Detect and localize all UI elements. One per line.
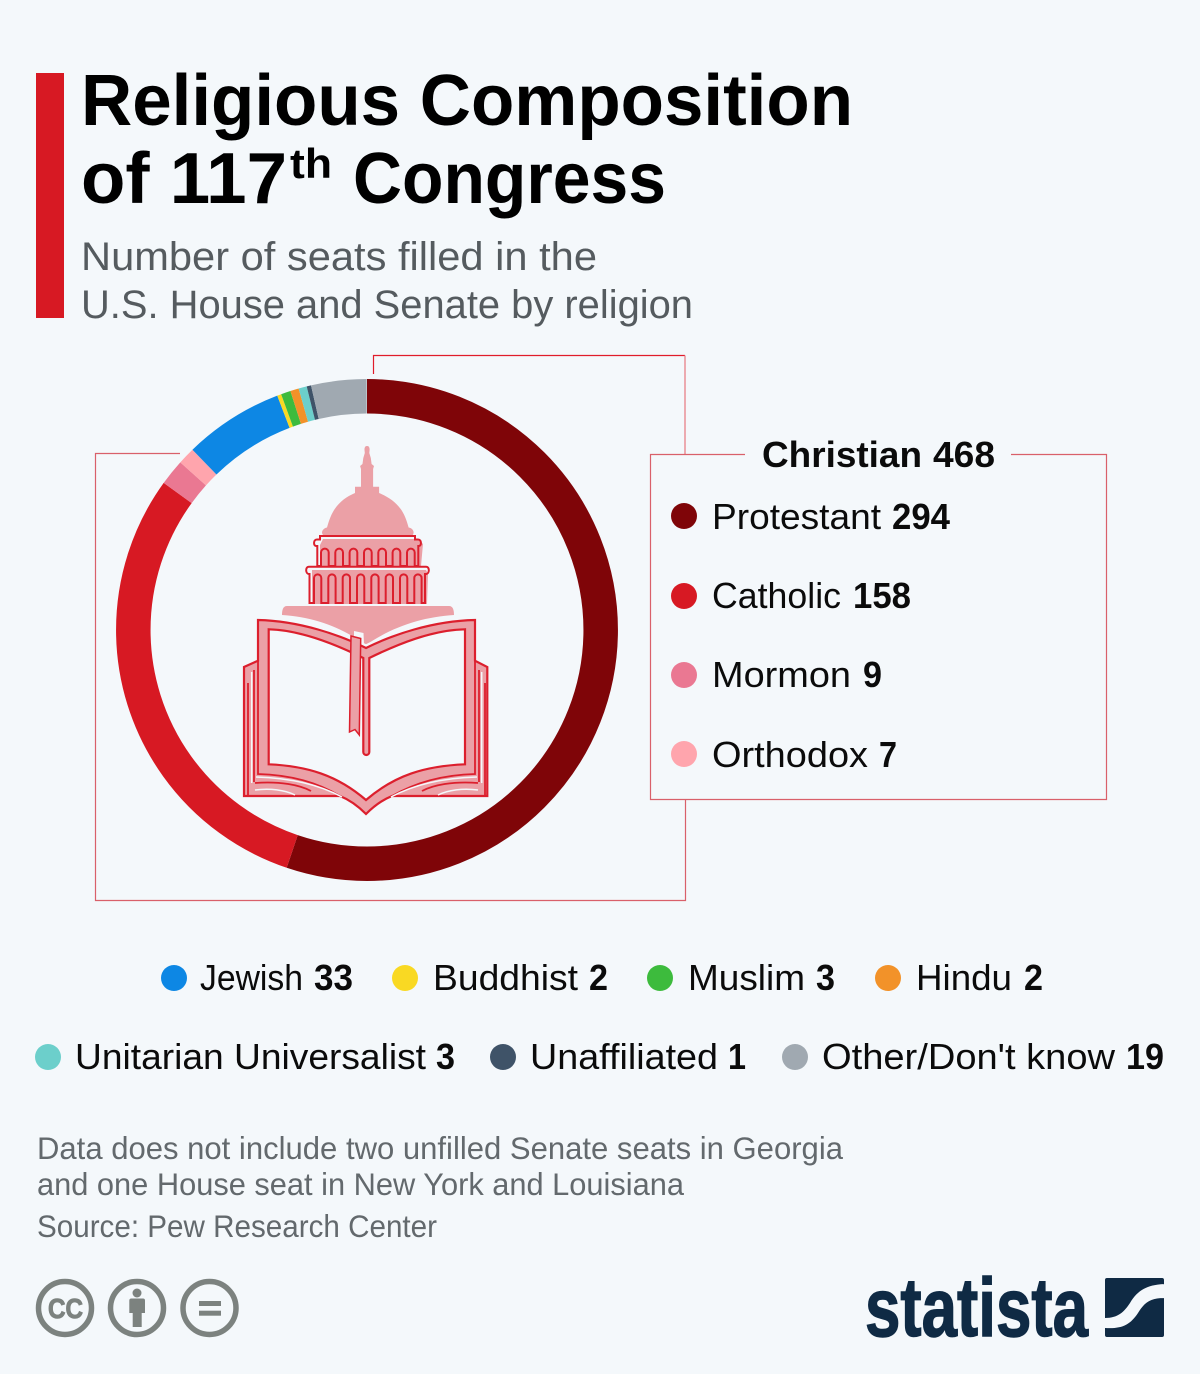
icon: creative commons [38,1282,92,1334]
legend item: Orthodox: 7 [879,734,897,775]
title: Congress [353,139,666,219]
footnote [37,1130,843,1202]
legend item: Catholic [671,575,911,616]
title: of 117 [81,139,287,219]
panel: Christian legend [650,434,1106,800]
title: Religious Composition [81,61,853,141]
legend item: Jewish: 33 [314,957,353,998]
legend item: Hindu [875,957,1043,998]
title: th [290,140,332,187]
legend item: Orthodox: Orthodox [712,734,868,775]
logo: statista: statista [865,1261,1089,1354]
legend item: Mormon: Mormon [712,654,851,695]
icon: capitol base [282,606,454,645]
legend item: Unaffiliated: 1 [728,1036,746,1077]
legend item: Catholic: 158 [853,575,911,616]
legend row: other religions, first row [161,957,1043,998]
footnote: Data does not include two unfilled Senate seats in Georgia [37,1130,843,1166]
legend item: Mormon [671,654,882,695]
icon: capitol dome [322,446,414,536]
legend item: Muslim: 3 [816,957,835,998]
subtitle: Number of seats filled in the [81,235,597,279]
icon: creative commons: CC [48,1293,83,1324]
legend item: Catholic: Catholic [712,575,841,616]
legend item: Hindu: 2 [1024,957,1043,998]
icon: open book [244,620,487,814]
heading: Christian 468 [762,434,995,475]
icon: bookmark ribbon [350,636,361,735]
connector frame around Christian segments [96,356,686,900]
icon: upper colonnade [314,536,423,566]
legend item: Unitarian Universalist: Unitarian Universalist [75,1036,426,1077]
logo mark [1105,1278,1164,1337]
legend item: Muslim: Muslim [688,957,805,998]
legend item: Jewish [161,957,353,998]
title accent bar [36,73,64,318]
donut chart [133,396,601,864]
legend item: Buddhist: Buddhist [433,957,578,998]
icon: no derivatives [183,1282,236,1334]
legend item: Unaffiliated: Unaffiliated [530,1036,718,1077]
icon: attribution [110,1282,164,1334]
legend row: other religions, second row [35,1036,1164,1077]
icon: capitol dome and open book [244,446,487,814]
legend item: Buddhist: 2 [589,957,608,998]
legend item: Jewish: Jewish [200,957,303,998]
subtitle: U.S. House and Senate by religion [81,283,693,327]
legend item: Orthodox [671,734,897,775]
legend item: Other/Don't know: Other/Don't know [822,1036,1116,1077]
legend item: Other/Don't know: 19 [1126,1036,1164,1077]
legend item: Mormon: 9 [863,654,882,695]
legend item: Protestant: Protestant [712,496,881,537]
legend item: Protestant [671,496,951,537]
heading: Christian 468: Christian [762,434,922,475]
subtitle [81,235,693,327]
legend item: Protestant: 294 [892,496,951,537]
icon: lower colonnade [306,567,429,604]
heading: Christian 468: 468 [933,434,995,475]
legend item: Muslim [647,957,835,998]
legend item: Hindu: Hindu [916,957,1012,998]
title [81,61,853,219]
legend item: Unitarian Universalist: 3 [436,1036,455,1077]
legend item: Buddhist [392,957,608,998]
source: Source: Pew Research Center [37,1208,437,1244]
footnote: and one House seat in New York and Louisiana [37,1166,684,1202]
